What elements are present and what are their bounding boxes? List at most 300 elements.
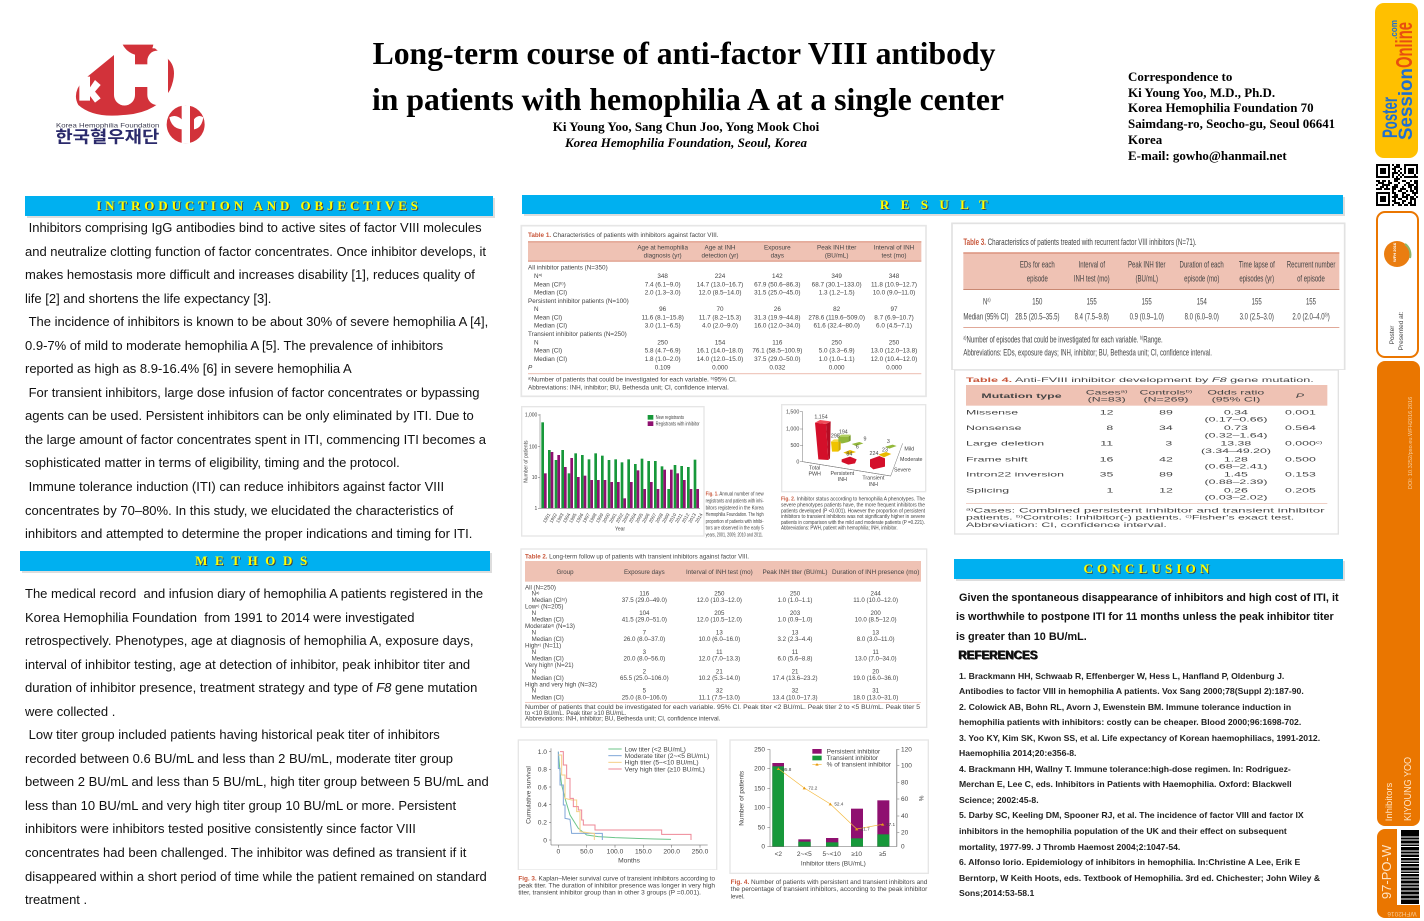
figure 2: inhibitor status 3D bar chart: Severe: [894, 468, 911, 474]
table 3: recurrent factor VIII inhibitors: 3.0 (2.5–3.0): [1240, 311, 1274, 322]
green total bar: [838, 435, 851, 443]
table 2: long-term follow up of transient inhibitors: 20: [872, 668, 880, 675]
figure 3: Kaplan-Meier survival curve: Low titer (<2 BU/mL): [625, 746, 686, 753]
table 1: characteristics of patients with inhibitors: 70: [716, 306, 724, 313]
heading: methods: [20, 551, 490, 571]
figure 4: persistent and transient inhibitors by titer: 60: [901, 796, 909, 803]
figure 1: annual number of new registrants bar chart: 1: [535, 506, 538, 512]
table 2: long-term follow up of transient inhibitors: 21: [716, 668, 723, 675]
table 1: characteristics of patients with inhibitors: 0.000: [829, 364, 845, 371]
table 2: long-term follow up of transient inhibitors: Duration of INH presence (mo): [832, 569, 919, 576]
table 1: characteristics of patients with inhibitors: 7.4 (6.1–9.0): [645, 281, 681, 288]
table 1: characteristics of patients with inhibitors: Median (CI): [534, 356, 567, 363]
table 2: long-term follow up of transient inhibitors: 8.0 (3.0–11.0): [857, 636, 895, 643]
figure 2: inhibitor status 3D bar chart: INH: [838, 477, 847, 483]
text: conclusion: is worthwhile to postpone ITI for 11 months unless the peak inhibitor titer: [956, 611, 1334, 623]
figure 2: inhibitor status 3D bar chart: 1,154: [814, 414, 828, 420]
table 4: anti-FVIII inhibitor development: 34: [1159, 425, 1173, 432]
figure 3: Kaplan-Meier survival curve: Cumulative survival: [526, 766, 533, 824]
table 1: characteristics of patients with inhibitors: Mean (CI): [534, 348, 562, 355]
table 4: anti-FVIII inhibitor development: (N=83): [1088, 397, 1126, 404]
figure 1: annual number of new registrants bar chart: Year: [615, 527, 625, 533]
table 2: long-term follow up of transient inhibitors: Abbreviations: INH, inhibitor; BU, Bethesda unit; CI, confidence interval.: [525, 716, 721, 723]
table 2: long-term follow up of transient inhibitors: 2: [643, 668, 647, 675]
figure 2 caption: Fig. 2. Inhibitor status according to hemophilia A phenotypes. The: [781, 497, 925, 503]
table 4: anti-FVIII inhibitor development: a): [966, 507, 975, 512]
figure 2: inhibitor status 3D bar chart: Mild: [904, 447, 914, 453]
table 1: characteristics of patients with inhibitors: 278.6 (119.6–509.0): [808, 314, 865, 321]
text: references: 3. Yoo KY, Kim SK, Kwon SS, et al. Life expectancy of Korean haemophiliacs, 1991-2012.: [959, 733, 1320, 743]
table 2: long-term follow up of transient inhibitors: Moderate: [525, 623, 551, 630]
figure 2: inhibitor status 3D bar chart: 298: [831, 434, 840, 440]
figure 4: persistent and transient inhibitors by titer: 80: [901, 779, 909, 786]
text: references: mortality, 1977-99. J Thromb Haemost 2004;2:1047-54.: [959, 842, 1180, 852]
table 2: long-term follow up of transient inhibitors: Interval of INH test (mo): [686, 569, 753, 576]
table 1: characteristics of patients with inhibitors: P: [528, 364, 533, 371]
sidebar: poster code and barcode: WFH2016: [1387, 910, 1417, 917]
logo: Korea Hemophilia Foundation: 한국혈우재단: [55, 128, 159, 147]
text: introduction: the large amount of factor concentrates spent in ITI, commencing ITI becomes a: [25, 432, 486, 447]
figure 1: annual number of new registrants bar chart: Number of patients: [524, 440, 530, 483]
text: methods: duration of inhibitor presence, treatment strategy and type of F8 gene mutation: [25, 680, 477, 695]
table 3: recurrent factor VIII inhibitors: of episode: [1297, 273, 1325, 284]
figure 4: persistent and transient inhibitors by titer: <2: [775, 851, 782, 858]
table 2: long-term follow up of transient inhibitors: Median (CI): [532, 655, 564, 662]
table 1: characteristics of patients with inhibitors: 11.7 (8.2–15.3): [699, 314, 741, 321]
text: introduction: life [2] and shortens the life expectancy [3].: [25, 291, 271, 306]
figure 1: annual number of new registrants bar chart: 2010: [668, 512, 678, 524]
table 4: anti-FVIII inhibitor development: Splicing: [966, 487, 1009, 494]
table 1: characteristics of patients with inhibitors: 31.5 (25.0–45.0): [754, 290, 801, 297]
table 4: anti-FVIII inhibitor development: c): [1316, 440, 1322, 445]
figure 4: persistent and transient inhibitors by titer: 0: [761, 844, 765, 851]
figure 1: annual number of new registrants bar chart: 1996: [575, 512, 585, 524]
heading: conclusion: CONCLUSION: [1083, 561, 1214, 576]
text: introduction: concentrates by 70–80%. In this study, we elucidated the characteristics of: [25, 503, 453, 518]
table 3: recurrent factor VIII inhibitors: Recurrent number: [1287, 259, 1336, 270]
figure 4: persistent and transient inhibitors by titer: 5~<10: [822, 851, 841, 858]
text: introduction: makes hemostasis more difficult and increases disability [1], reduces quality of: [25, 267, 475, 282]
table 1: characteristics of patients with inhibitors: 97: [890, 306, 898, 313]
table 3: recurrent factor VIII inhibitors: Time lapse of: [1239, 259, 1275, 270]
heading: methods: METHODS: [195, 553, 315, 568]
table 2: long-term follow up of transient inhibitors: 13.4 (10.0–17.3): [772, 694, 818, 701]
table 2: long-term follow up of transient inhibitors: Number of patients that could be investigated for each variable. 95% CI. Peak titer <2 BU/mL. Peak titer 2 to <5 BU/mL. Peak titer 5: [525, 704, 921, 711]
figure 4 caption: the percentage of transient inhibitors, according to the peak inhibitor: [731, 887, 927, 893]
figure 4: persistent and transient inhibitors by titer: 72.2: [808, 786, 818, 791]
heading: references: REFERENCES: [958, 649, 1038, 662]
figure 2: inhibitor status 3D bar chart: 194: [839, 429, 848, 435]
table 4: anti-FVIII inhibitor development: a): [1121, 389, 1128, 394]
table 1: characteristics of patients with inhibitors: 348: [657, 273, 668, 280]
table 2: long-term follow up of transient inhibitors: 13: [792, 629, 799, 636]
table 1: characteristics of patients with inhibitors: 224: [715, 273, 726, 280]
table 4: anti-FVIII inhibitor development: (0.88–2.39): [1204, 479, 1268, 486]
figure 4: persistent and transient inhibitors by titer: 100: [901, 763, 912, 770]
table 2: long-term follow up of transient inhibitors: c): [536, 604, 539, 608]
figure 4: persistent and transient inhibitors by titer: 2~<5: [797, 851, 812, 858]
table 4: anti-FVIII inhibitor development: 0.153: [1285, 472, 1317, 479]
text: methods: interval of inhibitor testing, age at detection of inhibitor, peak inhibitor titer and: [25, 657, 470, 672]
figure 2: inhibitor status 3D bar chart: Moderate: [900, 457, 923, 463]
table 4: anti-FVIII inhibitor development: Missense: [966, 409, 1019, 416]
figure 1: annual number of new registrants bar chart: 2011: [674, 512, 684, 524]
table 2: long-term follow up of transient inhibitors: Very high: [525, 662, 551, 669]
table 2: long-term follow up of transient inhibitors: 41.5 (29.0–51.0): [622, 617, 667, 624]
table 2: long-term follow up of transient inhibitors: 25.0 (8.0–106.0): [622, 694, 667, 701]
text: introduction: 0.9-7% of mild to moderate hemophilia A [5]. The prevalence of inhibitors: [25, 338, 443, 353]
table 2: long-term follow up of transient inhibitors: f): [551, 662, 553, 666]
figure 1: annual number of new registrants bar chart: 1993: [555, 512, 565, 524]
table 1: characteristics of patients with inhibitors: 154: [715, 339, 726, 346]
figure 4: persistent and transient inhibitors by titer: ≥5: [879, 851, 887, 858]
text: methods: The medical record and infusion diary of hemophilia A patients registered in the: [25, 586, 483, 601]
table 3: recurrent factor VIII inhibitors: Interval of: [1079, 259, 1106, 270]
table 2: long-term follow up of transient inhibitors: d): [551, 623, 554, 627]
table 1: characteristics of patients with inhibitors: 5.8 (4.7–6.9): [645, 348, 681, 355]
table 1: characteristics of patients with inhibitors: 348: [889, 273, 900, 280]
figure 4: persistent and transient inhibitors by titer: 52.4: [834, 802, 844, 807]
table 2: long-term follow up of transient inhibitors: to <10 BU/mL. Peak titer ≥10 BU/mL.: [525, 710, 627, 717]
table 1: characteristics of patients with inhibitors: a): [528, 375, 532, 380]
red total bar: [815, 420, 831, 460]
table 1: characteristics of patients with inhibitors: ): [564, 281, 566, 288]
table 1: characteristics of patients with inhibitors: days: [771, 252, 784, 259]
sidebar: PosterSessionOnline badge: Poster: [1379, 97, 1402, 138]
table 1: characteristics of patients with inhibitors: 250: [831, 339, 842, 346]
table 2: long-term follow up of transient inhibitors: 250: [714, 591, 725, 598]
table 1: characteristics of patients with inhibitors: Age at hemophilia: [637, 245, 688, 252]
table 1: characteristics of patients with inhibitors: 116: [772, 339, 783, 346]
table 4: anti-FVIII inhibitor development: Intron22 inversion: [966, 472, 1064, 479]
table 2: long-term follow up of transient inhibitors: 37.5 (29.0–49.0): [622, 597, 667, 604]
table 2: long-term follow up of transient inhibitors: Group: [556, 569, 574, 576]
table 2: long-term follow up of transient inhibitors: N: [532, 688, 536, 695]
table 3: recurrent factor VIII inhibitors: episodes (yr): [1239, 273, 1275, 284]
table 1: characteristics of patients with inhibitors: Table 1. Characteristics of patients with inhibitors against factor VIII.: [528, 232, 719, 239]
table 2: long-term follow up of transient inhibitors: N: [532, 649, 536, 656]
table 2: long-term follow up of transient inhibitors: 7: [643, 629, 647, 636]
figure 2: inhibitor status 3D bar chart: Total: [809, 465, 820, 471]
table 2: long-term follow up of transient inhibitors: 20.0 (8.0–56.0): [623, 655, 665, 662]
table 2: long-term follow up of transient inhibitors: 200: [871, 610, 881, 617]
table 1: characteristics of patients with inhibitors: 11.8 (10.9–12.7): [871, 281, 917, 288]
text: methods: less than 10 BU/mL and very high titer group 10 BU/mL or more. Persistent: [25, 798, 456, 813]
table 1: characteristics of patients with inhibitors: 5.0 (3.3–6.9): [819, 348, 855, 355]
figure 2 caption: Abbreviations: PWH, patient with hemophilia; INH, inhibitor.: [781, 526, 898, 532]
table 2: long-term follow up of transient inhibitors: Table 2. Long-term follow up of patients with transient inhibitors against factor VIII.: [525, 553, 749, 560]
figure 3: Kaplan-Meier survival curve: 100.0: [607, 849, 624, 856]
table 1: characteristics of patients with inhibitors: 14.0 (12.0–15.0): [697, 356, 743, 363]
figure 2: inhibitor status 3D bar chart: 500: [790, 443, 799, 449]
table 2: long-term follow up of transient inhibitors: 205: [714, 610, 725, 617]
table 4: anti-FVIII inhibitor development: 0.001: [1285, 409, 1316, 416]
table 2: long-term follow up of transient inhibitors: Median (CI: [532, 597, 562, 604]
text: methods: concentrates had been challenged. The inhibitor was defined as transient if it: [25, 845, 466, 860]
table 2: long-term follow up of transient inhibitors: N: [532, 610, 536, 617]
table 4: anti-FVIII inhibitor development: 0.34: [1224, 409, 1249, 416]
table 1: characteristics of patients with inhibitors: 31.3 (19.9–44.8): [754, 314, 801, 321]
figure 4: persistent and transient inhibitors by titer: %: [917, 795, 924, 801]
table 4: anti-FVIII inhibitor development: 1: [1107, 487, 1113, 494]
table 1: characteristics of patients with inhibitors: a): [539, 272, 543, 277]
figure 1: annual number of new registrants bar chart: 2008: [655, 512, 664, 524]
text: methods: between 2 BU/mL and less than 5 BU/mL, high titer group between 5 BU/mL and: [25, 774, 489, 789]
table 1: characteristics of patients with inhibitors: 16.1 (14.0–18.0): [697, 348, 743, 355]
table 1: characteristics of patients with inhibitors: 10.0 (9.0–11.0): [873, 290, 915, 297]
correspondence: Korea Hemophilia Foundation 70: [1128, 100, 1314, 115]
text: references: inhibitors in the hemophilia population of the UK and their effect on subsequent: [959, 826, 1287, 836]
figure 4 caption: Fig. 4. Number of patients with persistent and transient inhibitors and: [731, 880, 927, 886]
table 1: characteristics of patients with inhibitors: 0.032: [769, 364, 786, 371]
figure 1: annual number of new registrants bar chart: 2006: [641, 512, 651, 524]
figure 3: Kaplan-Meier survival curve: High titer (5~<10 BU/mL): [625, 760, 699, 767]
table 1: characteristics of patients with inhibitors: Age at INH: [705, 245, 736, 252]
table 4: anti-FVIII inhibitor development: Abbreviation: CI, confidence interval.: [966, 522, 1167, 529]
figure 2: inhibitor status 3D bar chart: [781, 404, 926, 492]
figure 4: persistent and transient inhibitors by titer: [730, 740, 929, 874]
table 4: anti-FVIII inhibitor development: Table 4. Anti-FVIII inhibitor development by F8 gene mutation.: [966, 377, 1314, 384]
table 4: anti-FVIII inhibitor development: 35: [1100, 472, 1114, 479]
text: conclusion: [956, 592, 1339, 642]
persistent bars: [842, 442, 863, 465]
text: methods: retrospectively. Phenotypes, age at diagnosis of hemophilia A, exposure days,: [25, 633, 474, 648]
table 2: long-term follow up of transient inhibitors: 11: [716, 649, 723, 656]
table 2: long-term follow up of transient inhibitors: N: [532, 629, 536, 636]
table 3: recurrent factor VIII inhibitors: b): [1325, 312, 1328, 318]
table 4: anti-FVIII inhibitor development: Odds ratio: [1207, 389, 1265, 396]
figure 1: annual number of new registrants bar chart: 1995: [568, 512, 578, 524]
transient bars: [870, 445, 897, 469]
sidebar: PosterSessionOnline badge: [1375, 3, 1418, 158]
figure 4: persistent and transient inhibitors by titer: % of transient inhibitor: [827, 762, 892, 769]
text: introduction: reported as high as 8.9-16.4% [6] in severe hemophilia A: [25, 361, 352, 376]
figure 4: persistent and transient inhibitors by titer: 200: [754, 766, 765, 773]
figure 3: Kaplan-Meier survival curve: 0: [543, 837, 547, 844]
sidebar: PosterSessionOnline badge: .com: [1389, 20, 1399, 39]
table 4: anti-FVIII inhibitor development: 0.500: [1285, 456, 1317, 463]
figure 2: inhibitor status 3D bar chart: 9: [864, 437, 867, 443]
table 4: anti-FVIII inhibitor development: c): [1185, 514, 1192, 519]
heading: result: [522, 195, 1343, 214]
figure 1: annual number of new registrants bar chart: 2002: [615, 512, 625, 524]
figure 4: persistent and transient inhibitors by titer: 0: [901, 844, 905, 851]
table 1: characteristics of patients with inhibitors: Exposure: [764, 245, 791, 252]
figure 3: Kaplan-Meier survival curve: 0: [556, 849, 560, 856]
title: in patients with hemophilia A at a single center: [372, 82, 1004, 116]
table 2: long-term follow up of transient inhibitors: 11: [792, 649, 799, 656]
heading: introduction and objectives: INTRODUCTION AND OBJECTIVES: [96, 198, 422, 212]
figure 2 caption: [781, 496, 926, 532]
table 2: long-term follow up of transient inhibitors: 13: [716, 629, 723, 636]
figure 1: annual number of new registrants bar chart: 1998: [588, 512, 598, 524]
table 3: recurrent factor VIII inhibitors: Table 3. Characteristics of patients treated with recurrent factor VIII inhibitors (N=71).: [963, 237, 1197, 247]
icon: WFH 2016 congress logo: [1384, 241, 1410, 267]
table 2: long-term follow up of transient inhibitors: 18.0 (13.0–31.0): [853, 694, 898, 701]
table 1: characteristics of patients with inhibitors: 250: [657, 339, 668, 346]
table 2: long-term follow up of transient inhibitors: 11: [872, 649, 879, 656]
figure 1: annual number of new registrants bar chart: 1992: [549, 512, 558, 524]
table 1: characteristics of patients with inhibitors: Abbreviations: INH, inhibitor; BU, Bethesda unit; CI, confidence interval.: [528, 384, 729, 391]
title: [372, 36, 1004, 117]
text: introduction: inhibitors and attempted to determine the proper indications and timing for ITI.: [25, 526, 472, 541]
table 2: long-term follow up of transient inhibitors: 17.4 (13.6–23.2): [772, 675, 818, 682]
figure 2: inhibitor status 3D bar chart: 1,500: [786, 409, 799, 415]
table 2: long-term follow up of transient inhibitors: ): [565, 597, 567, 604]
figure 4: persistent and transient inhibitors by titer: Transient inhibitor: [827, 755, 879, 762]
table 2: long-term follow up of transient inhibitors: a): [536, 591, 539, 595]
title: Long-term course of anti-factor VIII antibody: [373, 36, 995, 70]
table 1: characteristics of patients with inhibitors: 13.0 (12.0–13.8): [871, 348, 917, 355]
figure 3: Kaplan-Meier survival curve: 0.4: [538, 802, 547, 809]
table 1: characteristics of patients with inhibitors: 2.0 (1.3–3.0): [645, 290, 681, 297]
table 2: long-term follow up of transient inhibitors: 31: [872, 688, 880, 695]
table 4: anti-FVIII inhibitor development: 42: [1159, 456, 1173, 463]
table 4: anti-FVIII inhibitor development: 1.28: [1224, 456, 1249, 463]
table 2: long-term follow up of transient inhibitors: N: [532, 668, 536, 675]
table 2: long-term follow up of transient inhibitors: (N=13): [554, 623, 575, 630]
table 4: anti-FVIII inhibitor development: 0.26: [1224, 487, 1249, 494]
table 1: characteristics of patients with inhibitors: Interval of INH: [874, 245, 915, 252]
sidebar: orange topic bar: DOI: 10.3252/pso.eu.WFH2016.2016: [1408, 397, 1414, 489]
table 3: recurrent factor VIII inhibitors: episode (mo): [1184, 273, 1220, 284]
table 4: anti-FVIII inhibitor development: 89: [1159, 472, 1173, 479]
table 1: characteristics of patients with inhibitors: 11.6 (8.1–15.8): [641, 314, 684, 321]
table 4: anti-FVIII inhibitor development: (0.03–2.02): [1204, 495, 1268, 502]
table 3: recurrent factor VIII inhibitors: (BU/mL): [1136, 273, 1158, 284]
text: references: 5. Darby SC, Keeling DM, Spooner RJ, et al. The incidence of factor VIII and factor IX: [959, 810, 1304, 820]
sidebar: presented at badge: [1376, 211, 1419, 358]
table 1: characteristics of patients with inhibitors: 142: [772, 273, 783, 280]
figure 2: inhibitor status 3D bar chart: INH: [869, 482, 878, 488]
table 1: characteristics of patients with inhibitors: 12.0 (10.4–12.0): [871, 356, 917, 363]
correspondence: Ki Young Yoo, M.D., Ph.D.: [1128, 85, 1275, 100]
table 1: characteristics of patients with inhibitors: 6.0 (4.5–7.1): [876, 323, 912, 330]
text: introduction: For transient inhibitors, large dose infusion of factor concentrates or bypassing: [29, 385, 480, 400]
table 1: characteristics of patients with inhibitors: Mean (CI): [534, 314, 562, 321]
table 4: anti-FVIII inhibitor development: 0.205: [1285, 487, 1317, 494]
text: introduction: The incidence of inhibitors is known to be about 30% of severe hemophilia A [4],: [29, 314, 488, 329]
figure 2: inhibitor status 3D bar chart: 84: [846, 452, 852, 458]
table 4: anti-FVIII inhibitor development: Frame shift: [966, 456, 1028, 463]
table 1: characteristics of patients with inhibitors: N: [534, 273, 539, 280]
table 3: recurrent factor VIII inhibitors: 154: [1197, 296, 1207, 307]
figure 1: annual number of new registrants bar chart: 2014: [694, 512, 704, 524]
table 2: long-term follow up of transient inhibitors: High and very high (N=32): [525, 681, 597, 688]
sidebar: presented at badge: Poster: [1389, 325, 1396, 344]
text: introduction: Inhibitors comprising IgG antibodies bind to active sites of factor VIII molecules: [29, 220, 482, 235]
table 4: anti-FVIII inhibitor development: (95% CI): [1212, 397, 1260, 404]
table 1: characteristics of patients with inhibitors: Median (CI): [534, 323, 567, 330]
figure 2 caption: severe phenotypes patients have, the more frequent inhibitors the: [781, 502, 925, 508]
table 1: characteristics of patients with inhibitors: 349: [831, 273, 842, 280]
text: references: 6. Alfonso Iorio. Epidemiology of inhibitors in hemophilia. In:Christine A Lee, Erik E: [959, 857, 1300, 867]
figure 1: annual number of new registrants bar chart: 2003: [621, 512, 631, 524]
correspondence: [1128, 69, 1335, 163]
yellow total bar: [831, 439, 841, 452]
figure 3: Kaplan-Meier survival curve: Moderate titer (2~<5 BU/mL): [625, 753, 709, 760]
text: references: [959, 670, 1320, 898]
icon: QR code: [1376, 164, 1418, 206]
icon: WFH 2016 congress logo: WFH 2016: [1392, 242, 1397, 262]
figure 4: persistent and transient inhibitors by titer: 120: [901, 746, 912, 753]
table 2: long-term follow up of transient inhibitors: 19.0 (16.0–36.0): [853, 675, 898, 682]
figure 1: annual number of new registrants bar chart: 2005: [635, 512, 644, 524]
table 1: characteristics of patients with inhibitors: Peak INH titer: [817, 245, 856, 252]
figure 2: inhibitor status 3D bar chart: PWH: [808, 472, 821, 478]
table 4: anti-FVIII inhibitor development: P: [1296, 393, 1305, 400]
table 1: characteristics of patients with inhibitors: 96: [659, 306, 667, 313]
figure 4: persistent and transient inhibitors by titer: 95.8: [782, 767, 792, 772]
text: references: 1. Brackmann HH, Schwaab R, Effenberger W, Hess L, Hanfland P, Oldenburg J.: [959, 670, 1284, 680]
table 4: anti-FVIII inhibitor development: 0.564: [1285, 425, 1317, 432]
table 2: long-term follow up of transient inhibitors: 10.2 (5.3–14.0): [698, 675, 740, 682]
table 2: long-term follow up of transient inhibitors: 104: [639, 610, 650, 617]
table 1: characteristics of patients with inhibitors: Mean (CI: [534, 281, 560, 288]
table 1: characteristics of patients with inhibitors: (BU/mL): [825, 252, 848, 259]
table 1: characteristics of patients with inhibitors: Transient inhibitor patients (N=250): [528, 331, 627, 338]
figure 1: annual number of new registrants bar chart: 2009: [661, 512, 671, 524]
text: conclusion: is greater than 10 BU/mL.: [956, 630, 1087, 642]
table 1: characteristics of patients with inhibitors: 1.3 (1.2–1.5): [819, 290, 855, 297]
table 1: characteristics of patients with inhibitors: [520, 225, 927, 397]
text: methods: were collected .: [25, 704, 115, 719]
correspondence: Korea: [1128, 132, 1162, 147]
table 2: long-term follow up of transient inhibitors: [520, 548, 928, 728]
table 2: long-term follow up of transient inhibitors: 13: [872, 629, 880, 636]
table 4: anti-FVIII inhibitor development: 3: [1165, 441, 1173, 448]
table 4: anti-FVIII inhibitor development: Cases: Combined persistent inhibitor and transient inhibitor: [974, 508, 1325, 515]
table 1: characteristics of patients with inhibitors: 250: [889, 339, 900, 346]
table 1: characteristics of patients with inhibitors: Number of patients that could be investigated for each variable.: [532, 376, 711, 383]
table 4: anti-FVIII inhibitor development: [954, 370, 1339, 535]
text: methods: treatment .: [25, 892, 87, 907]
table 1: characteristics of patients with inhibitors: Persistent inhibitor patients (N=100): [528, 298, 629, 305]
table 3: recurrent factor VIII inhibitors: Abbreviations: EDs, exposure days; INH, inhibitor; BU, Bethesda unit; CI, confidence interval.: [963, 347, 1212, 358]
table 2: long-term follow up of transient inhibitors: 1.0 (0.9–1.0): [778, 617, 812, 624]
correspondence: Saimdang-ro, Seocho-gu, Seoul 06641: [1128, 116, 1335, 131]
table 1: characteristics of patients with inhibitors: 76.1 (58.5–100.9): [752, 348, 802, 355]
figure 4: persistent and transient inhibitors by titer: Persistent inhibitor: [827, 749, 881, 756]
table 2: long-term follow up of transient inhibitors: All (N=250): [525, 584, 556, 591]
table 4: anti-FVIII inhibitor development: 16: [1100, 456, 1114, 463]
table 1: characteristics of patients with inhibitors: N: [534, 339, 539, 346]
table 2: long-term follow up of transient inhibitors: 5: [643, 688, 647, 695]
table 1: characteristics of patients with inhibitors: 16.0 (12.0–34.0): [754, 323, 801, 330]
figure 4: persistent and transient inhibitors by titer: 20: [901, 830, 909, 837]
table 3: recurrent factor VIII inhibitors: a): [963, 335, 967, 341]
table 4: anti-FVIII inhibitor development: Fisher's exact test.: [1192, 514, 1294, 521]
figure 2: inhibitor status 3D bar chart: 6: [856, 445, 859, 451]
logo: Korea Hemophilia Foundation: Korea Hemophilia Foundation: [56, 123, 159, 129]
table 3: recurrent factor VIII inhibitors: b): [1140, 335, 1144, 341]
text: methods: disappeared within a short period of time while the patient remained on standard: [25, 869, 487, 884]
sidebar: poster code and barcode: 97-PO-W: [1379, 844, 1394, 899]
figure 1: annual number of new registrants bar chart: 1997: [582, 512, 591, 524]
table 1: characteristics of patients with inhibitors: All inhibitor patients (N=350): [528, 265, 608, 272]
table 2: long-term follow up of transient inhibitors: 11.1 (7.5–13.0): [699, 694, 740, 701]
table 2: long-term follow up of transient inhibitors: Low: [525, 604, 536, 611]
table 2: long-term follow up of transient inhibitors: 1.0 (1.0–1.1): [778, 597, 812, 604]
logo: Korea Hemophilia Foundation: [55, 44, 205, 147]
table 4: anti-FVIII inhibitor development: Nonsense: [966, 425, 1022, 432]
figure 1: annual number of new registrants bar chart: 2000: [602, 512, 611, 524]
table 2: long-term follow up of transient inhibitors: (N=11): [541, 643, 561, 650]
table 4: anti-FVIII inhibitor development: patients.: [966, 514, 1013, 521]
sidebar: poster code and barcode: [1377, 829, 1420, 918]
table 1: characteristics of patients with inhibitors: 12.0 (8.5–14.0): [699, 290, 741, 297]
table 1: characteristics of patients with inhibitors: 1.8 (1.0–2.0): [645, 356, 681, 363]
